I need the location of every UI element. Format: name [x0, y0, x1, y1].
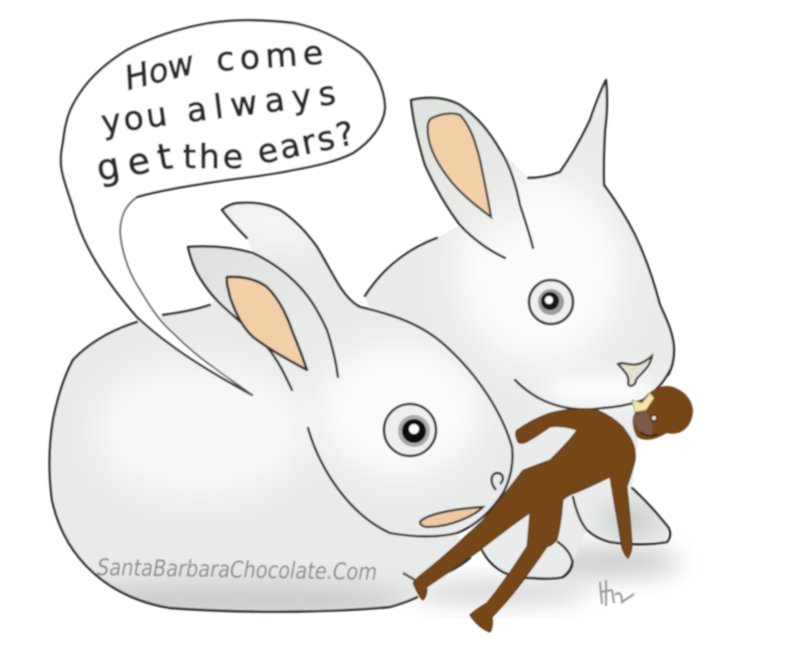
front rabbit fill — [50, 202, 482, 612]
figure face — [633, 410, 653, 437]
bubble tail inner line — [120, 197, 252, 395]
back rabbit ear — [411, 98, 533, 258]
figure body — [413, 409, 635, 632]
chocolate figure — [403, 386, 693, 632]
front rabbit ear — [188, 246, 338, 390]
front rabbit — [40, 190, 520, 618]
front rabbit nose — [492, 473, 503, 490]
ground shadows — [410, 546, 680, 604]
illustration: two rabbits and chocolate figure — [47, 18, 694, 634]
website text: SantaBarbaraChocolate.Com — [97, 555, 377, 586]
bubble outline — [61, 20, 385, 395]
bubble shape — [61, 20, 385, 395]
bubble text: come — [215, 33, 324, 79]
front rabbit outlines — [222, 210, 247, 238]
bubble text: get — [93, 136, 175, 190]
bubble text: the — [183, 137, 243, 176]
back rabbit inner ear — [428, 113, 491, 217]
bubble text: ears? — [254, 113, 358, 172]
back rabbit eye — [529, 280, 573, 324]
front rabbit inner ear — [227, 277, 307, 370]
bubble text: you — [99, 94, 169, 142]
back rabbit outlines — [365, 238, 437, 296]
signature — [600, 580, 634, 606]
bubble text: How — [121, 43, 199, 98]
bubble text — [93, 33, 358, 190]
figure bow — [632, 393, 654, 412]
figure foot ties — [403, 573, 415, 580]
back rabbit — [362, 78, 676, 581]
back rabbit fill — [364, 84, 674, 579]
figure head — [633, 386, 693, 440]
front rabbit mouth — [420, 507, 483, 527]
front rabbit eye — [384, 404, 436, 456]
bubble text: always — [184, 73, 338, 130]
back rabbit nose — [618, 356, 652, 386]
speech bubble — [61, 20, 385, 395]
